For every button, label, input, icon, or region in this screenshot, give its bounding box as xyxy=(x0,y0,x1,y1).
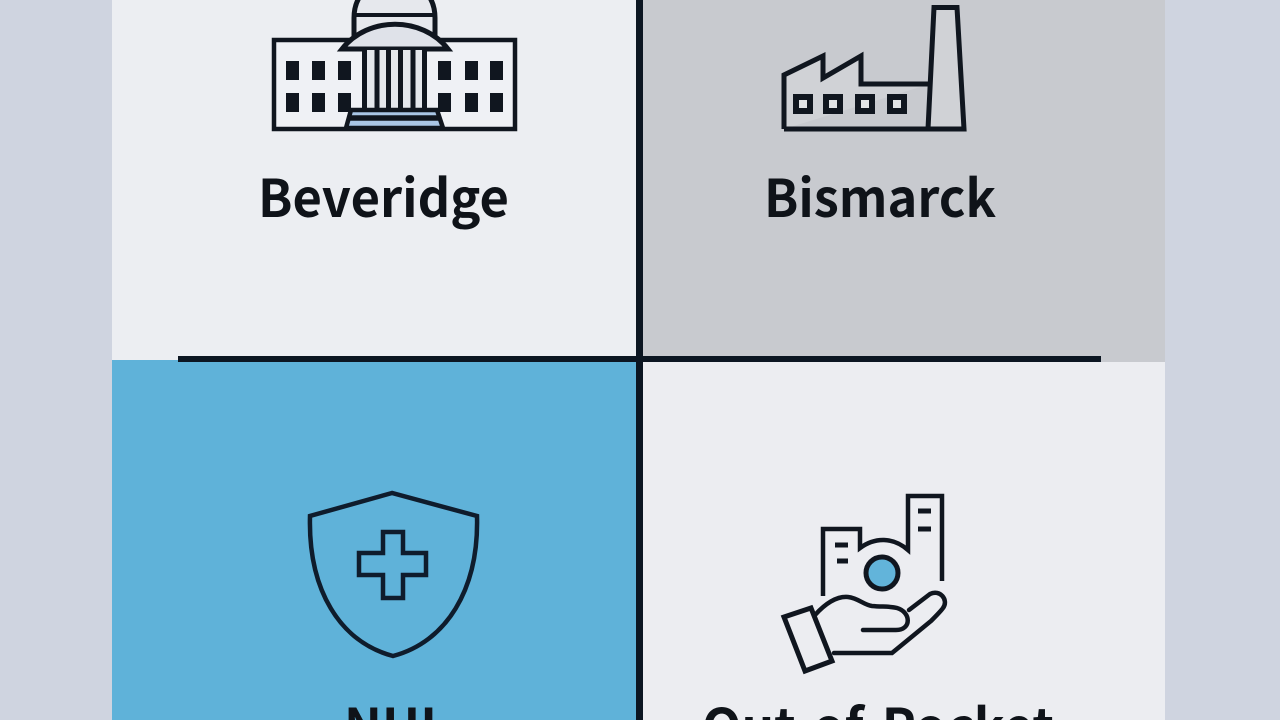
icon: hand holding coin and buildings xyxy=(784,496,945,671)
panel: Out of Pocket xyxy=(643,362,1165,720)
panel: Beveridge xyxy=(112,0,637,360)
divider: vertical xyxy=(636,0,643,720)
icon: government building xyxy=(274,0,515,129)
divider: horizontal xyxy=(178,356,1101,362)
icon: factory xyxy=(784,8,964,129)
heading: Bismarck: Bismarck xyxy=(764,157,997,232)
panel: NHI xyxy=(112,360,637,720)
heading: Beveridge: Beveridge xyxy=(258,157,509,232)
icon: shield with cross xyxy=(310,493,477,656)
icon: coin xyxy=(866,557,898,589)
panel: Bismarck xyxy=(643,0,1165,362)
